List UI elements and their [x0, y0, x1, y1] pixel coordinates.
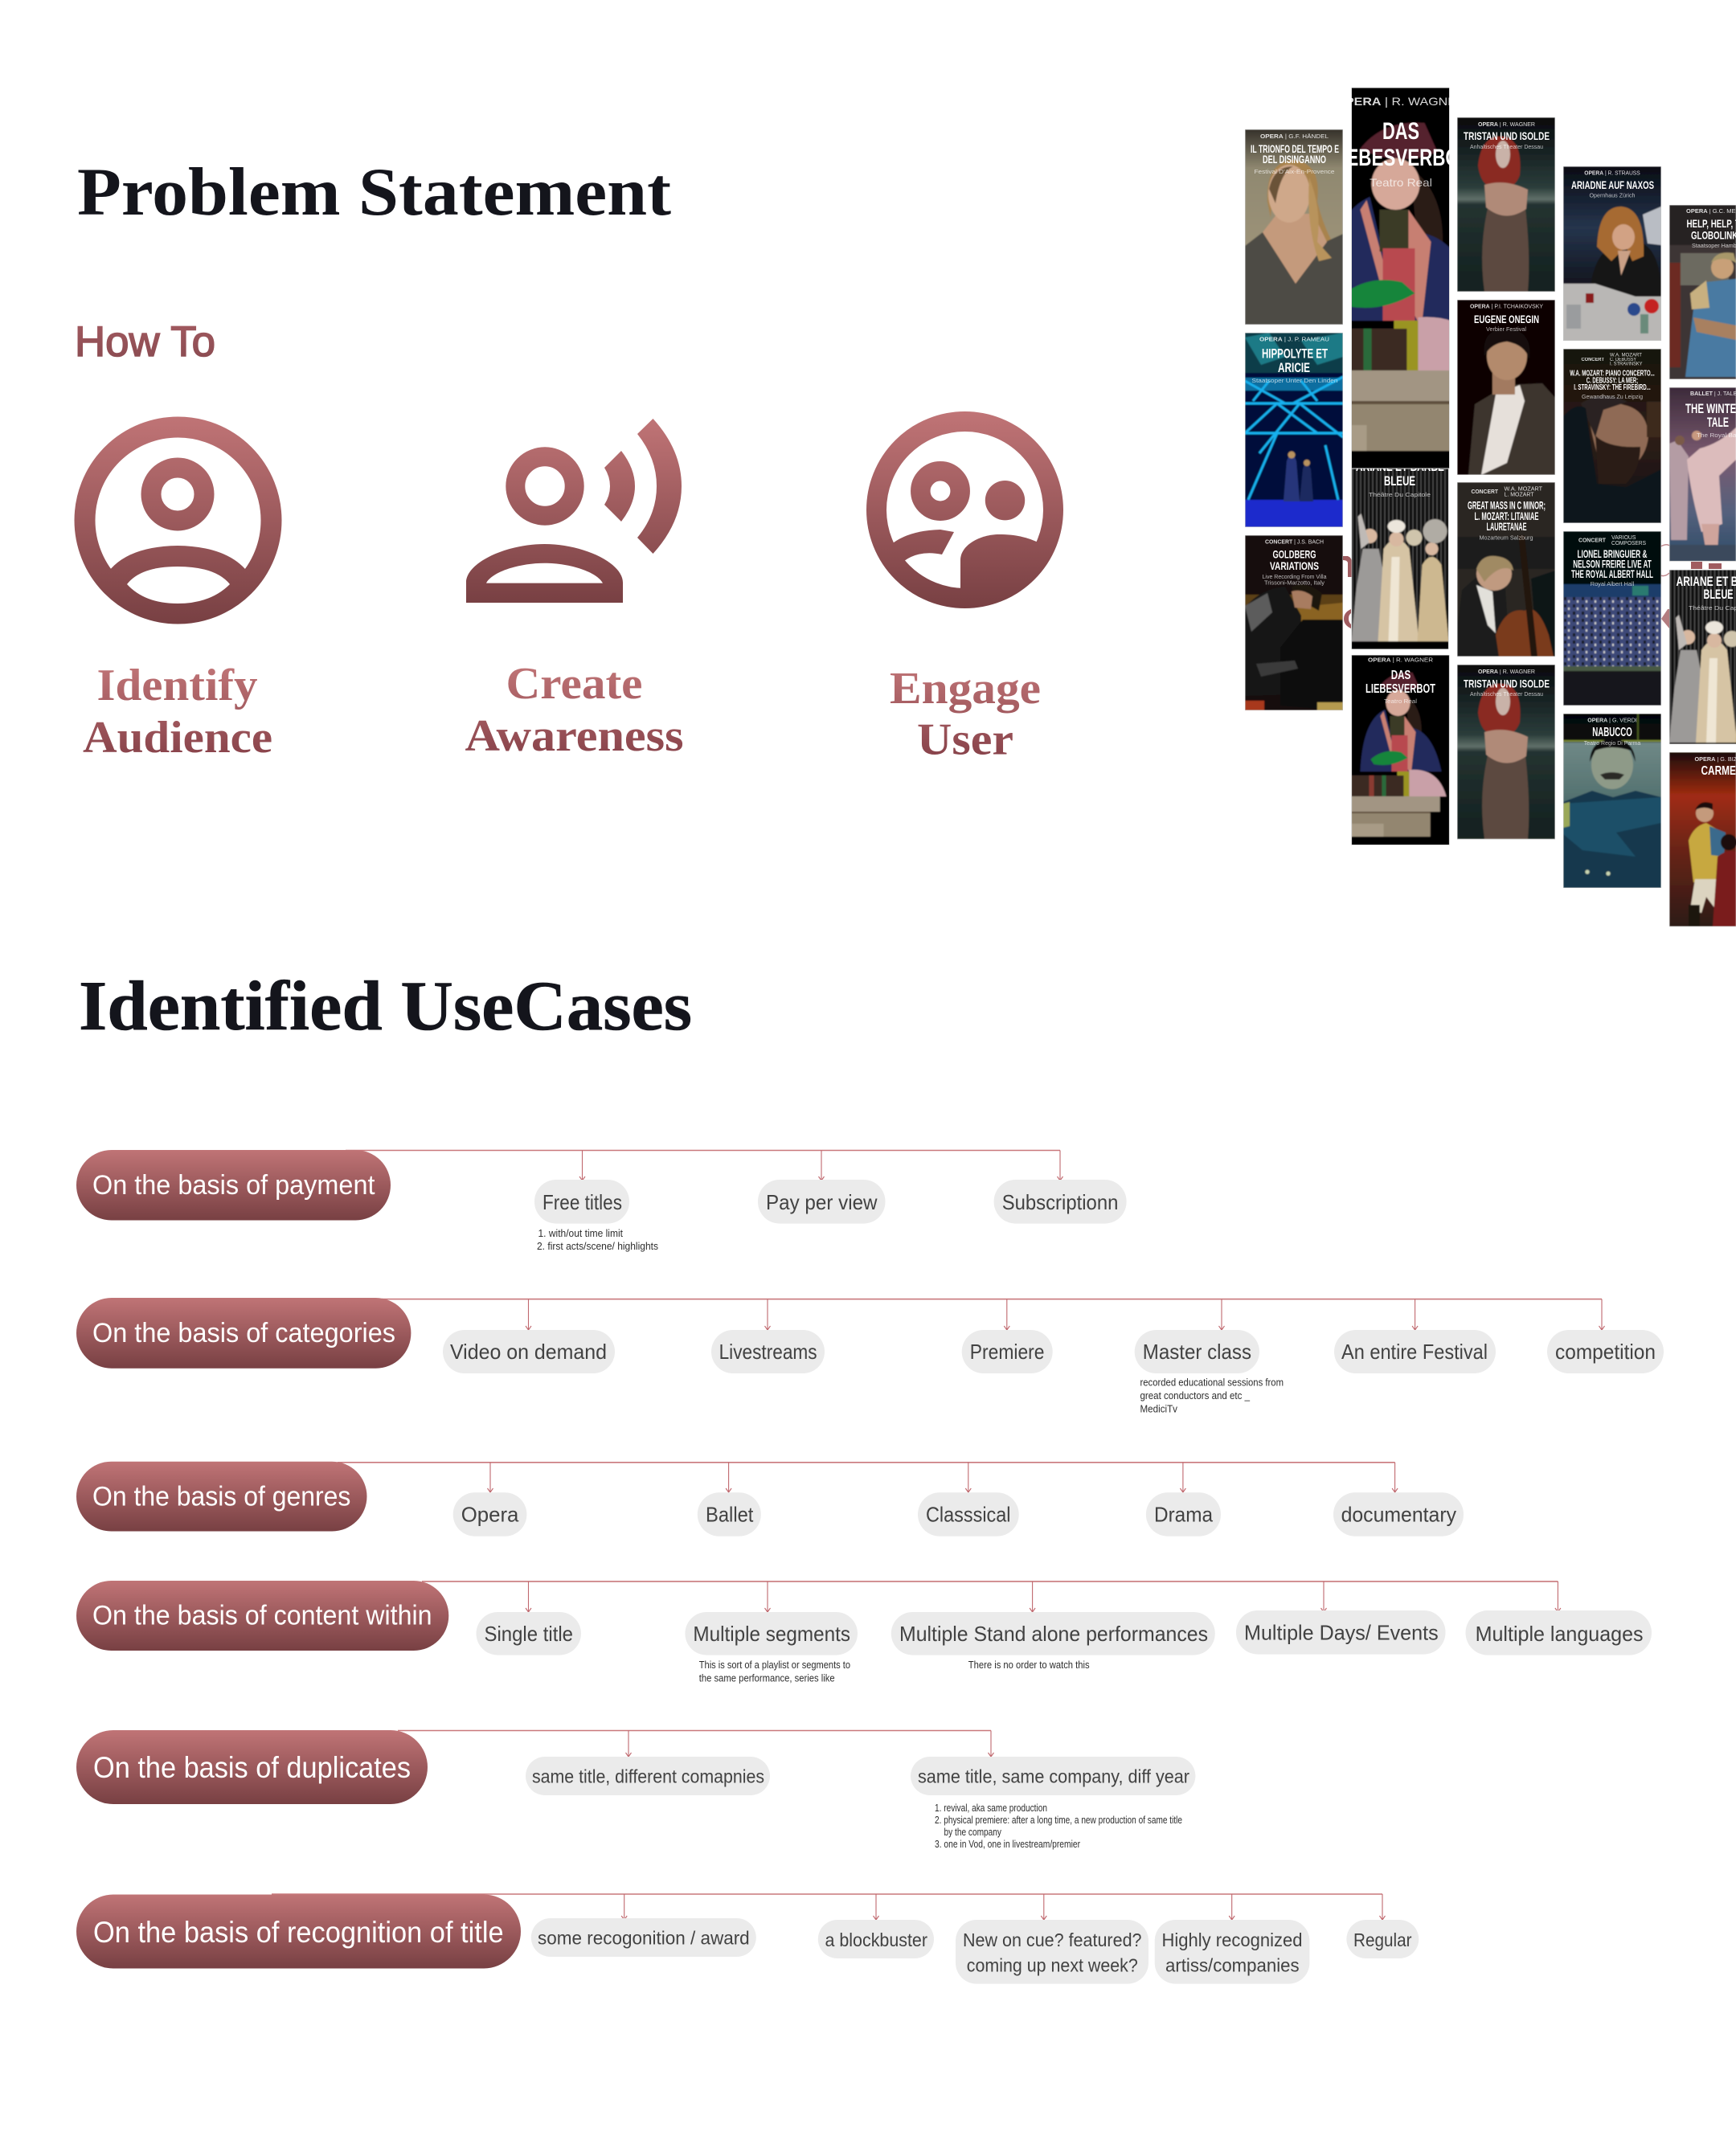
poster: Tristan und Isolde, second: [1457, 665, 1555, 839]
poster: Das Liebesverbot: [1352, 655, 1450, 845]
tree: on the basis of payment: [76, 1150, 1127, 1252]
poster: Il Trionfo del Tempo e del Disinganno: [1245, 129, 1343, 325]
option: same title, different comapnies: same title, different comapnies: [532, 1766, 764, 1787]
poster: Das Liebesverbot: LIEBESVERBOT: [1365, 682, 1435, 696]
option: Classsical: [918, 1492, 1019, 1537]
note: same company details: 2. physical premiere: after a long time, a new production of same title: [935, 1815, 1182, 1826]
label: Create Awareness: Awareness: [465, 711, 683, 761]
note: same company details: 3. one in Vod, one in livestream/premier: [935, 1839, 1080, 1850]
category pill: genres: On the basis of genres: [92, 1482, 350, 1512]
tree: on the basis of categories: [76, 1298, 1664, 1414]
label: Engage User: Engage: [890, 664, 1041, 714]
category pill: categories: On the basis of categories: [92, 1318, 395, 1348]
poster: Great Mass in C Minor: L. MOZART: [1505, 492, 1534, 498]
option: Multiple segments: Multiple segments: [693, 1622, 850, 1646]
poster: W.A. Mozart piano concerto: C. DEBUSSY: [1610, 358, 1636, 362]
option: Multiple languages: [1466, 1610, 1652, 1655]
option: documentary: documentary: [1341, 1503, 1456, 1527]
poster: Great Mass in C Minor: GREAT MASS IN C MINOR;: [1468, 498, 1546, 511]
option: competition: competition: [1555, 1340, 1656, 1364]
poster: Tristan und Isolde: Anhaltisches Theater Dessau: [1470, 143, 1543, 150]
option: Livestreams: Livestreams: [719, 1340, 817, 1364]
poster: Lionel Bringuier and Nelson Freire: THE ROYAL ALBERT HALL: [1571, 567, 1653, 580]
poster: Tristan und Isolde: OPERA | R. WAGNER: [1478, 122, 1535, 128]
poster: Tristan und Isolde, second: Anhaltisches Theater Dessau: [1470, 690, 1543, 698]
option: Multiple segments: [685, 1612, 858, 1655]
poster: Tristan und Isolde, second: TRISTAN UND ISOLDE: [1464, 677, 1550, 689]
option: Subscriptionn: Subscriptionn: [1002, 1190, 1118, 1214]
heading: Identified UseCases: Identified UseCases: [79, 968, 692, 1045]
poster: Il Trionfo del Tempo e del Disinganno: DEL DISINGANNO: [1263, 153, 1326, 166]
option: Multiple languages: Multiple languages: [1476, 1622, 1644, 1646]
subheading: How To: How To: [75, 318, 215, 366]
icon: person broadcasting: [466, 419, 682, 603]
note: free title details: 1. with/out time limit: [538, 1228, 623, 1239]
option: new on cue: [956, 1920, 1148, 1984]
poster: W.A. Mozart piano concerto: [1563, 349, 1661, 523]
poster: Tristan und Isolde, second: OPERA | R. WAGNER: [1478, 669, 1535, 675]
poster: Das Liebesverbot, enlarged: DAS: [1382, 118, 1419, 145]
poster: Goldberg Variations: Trissoni-Marzotto, Italy: [1264, 579, 1325, 587]
poster: Carmen: [1669, 752, 1736, 927]
poster: Il Trionfo del Tempo e del Disinganno: OPERA | G.F. HÄNDEL: [1260, 133, 1329, 140]
poster: Nabucco: OPERA | G. VERDI: [1587, 718, 1637, 723]
option: Premiere: [962, 1330, 1053, 1373]
poster: Goldberg Variations: GOLDBERG: [1273, 548, 1316, 561]
poster: Eugene Onegin: OPERA | P.I. TCHAIKOVSKY: [1470, 304, 1543, 310]
note: master class details: [1140, 1377, 1284, 1414]
category pill: genres: [76, 1462, 366, 1532]
label: Create Awareness: Create: [506, 659, 643, 709]
panel: how-to goals: [83, 419, 1053, 765]
option: some recogonition / award: some recogonition / award: [538, 1928, 750, 1949]
panel: opera poster collage: [1245, 88, 1736, 927]
tree: on the basis of genres: [76, 1462, 1464, 1537]
option: new on cue: New on cue? featured?: [963, 1929, 1141, 1950]
poster: Das Liebesverbot: OPERA | R. WAGNER: [1368, 657, 1433, 664]
poster: Il Trionfo del Tempo e del Disinganno: IL TRIONFO DEL TEMPO E: [1251, 142, 1339, 155]
option: Free titles: [534, 1180, 629, 1224]
category pill: recognition of title: On the basis of recognition of title: [93, 1916, 504, 1949]
poster: Lionel Bringuier and Nelson Freire: NELSON FREIRE LIVE AT: [1573, 558, 1652, 571]
poster: Ariane et Barbe-Bleue: Théâtre Du Capitole: [1369, 491, 1431, 498]
option: Video on demand: Video on demand: [450, 1340, 607, 1364]
icon: person in circle: [85, 428, 272, 615]
poster: Hippolyte et Aricie: [1245, 333, 1343, 527]
poster: Das Liebesverbot: Teatro Real: [1384, 698, 1417, 705]
tree: on the basis of duplicates: [76, 1730, 1195, 1850]
icon: two people in circle: [876, 421, 1053, 599]
poster: Das Liebesverbot, enlarged: [1352, 88, 1450, 469]
option: Pay per view: [758, 1180, 886, 1224]
label: Engage User: User: [917, 715, 1013, 765]
poster: Tristan und Isolde: TRISTAN UND ISOLDE: [1464, 129, 1550, 142]
option: a blockbuster: [818, 1920, 934, 1958]
poster: Nabucco: NABUCCO: [1592, 726, 1632, 739]
poster: Hippolyte et Aricie: ARICIE: [1278, 360, 1310, 375]
tree: on the basis of content within: [76, 1581, 1652, 1684]
poster: Il Trionfo del Tempo e del Disinganno: Festival D'Aix-En-Provence: [1254, 168, 1334, 175]
poster: Ariadne auf Naxos: ARIADNE AUF NAXOS: [1571, 178, 1654, 191]
poster: W.A. Mozart piano concerto: CONCERT: [1582, 358, 1604, 362]
option: Single title: Single title: [484, 1622, 573, 1646]
poster: Lionel Bringuier and Nelson Freire: CONCERT: [1578, 538, 1607, 543]
note: free title details: [537, 1228, 658, 1252]
poster: Tristan und Isolde: [1457, 117, 1555, 292]
category pill: content within: [76, 1581, 448, 1651]
poster: Ariadne auf Naxos: Opernhaus Zürich: [1590, 191, 1635, 199]
poster: W.A. Mozart piano concerto: W.A. MOZART: [1610, 354, 1642, 358]
poster: Goldberg Variations: VARIATIONS: [1270, 559, 1319, 572]
option: Regular: Regular: [1353, 1929, 1412, 1950]
note: multiple segments details: [699, 1659, 850, 1684]
option: highly recognized: [1155, 1920, 1309, 1984]
poster: W.A. Mozart piano concerto: I. STRAVINSKY: THE FIREBIRD...: [1574, 383, 1651, 392]
option: Classsical: Classsical: [926, 1503, 1011, 1527]
option: Ballet: [698, 1492, 761, 1537]
poster: Nabucco: [1563, 714, 1661, 888]
poster: Lionel Bringuier and Nelson Freire: [1563, 531, 1661, 706]
option: Multiple Days/ Events: Multiple Days/ Events: [1244, 1621, 1439, 1645]
poster: Hippolyte et Aricie: Staatsoper Unter Den Linden: [1252, 377, 1337, 384]
poster: Great Mass in C Minor: LAURETANAE: [1487, 520, 1527, 533]
poster: Ariane et Barbe-Bleue: ARIANE ET BARBE: [1356, 459, 1444, 474]
note: master class details: recorded educational sessions from: [1140, 1377, 1284, 1389]
category pill: content within: On the basis of content within: [92, 1600, 432, 1631]
category pill: duplicates: [76, 1730, 428, 1804]
poster: Das Liebesverbot, enlarged: Teatro Real: [1370, 176, 1432, 189]
poster: Eugene Onegin: [1457, 300, 1555, 475]
goal: create awareness: [465, 419, 683, 761]
option: Subscriptionn: [994, 1180, 1127, 1224]
option: new on cue: coming up next week?: [967, 1955, 1138, 1976]
poster: Lionel Bringuier and Nelson Freire: LIONEL BRINGUIER &: [1577, 547, 1648, 560]
option: Master class: [1135, 1330, 1259, 1373]
note: multiple segments details: the same performance, series like: [699, 1673, 835, 1684]
option: Multiple Days/ Events: [1236, 1610, 1445, 1655]
label: Identify Audience: Identify: [96, 661, 257, 710]
rose text fragments hidden behind posters: [1343, 545, 1722, 628]
option: competition: [1547, 1330, 1664, 1373]
option: Regular: [1346, 1920, 1419, 1958]
poster: Lionel Bringuier and Nelson Freire: COMPOSERS: [1611, 541, 1646, 546]
poster: Lionel Bringuier and Nelson Freire: VARIOUS: [1611, 535, 1636, 541]
option: same title, different comapnies: [526, 1757, 770, 1795]
option: An entire Festival: An entire Festival: [1341, 1340, 1488, 1364]
option: Pay per view: Pay per view: [766, 1190, 878, 1214]
option: some recogonition / award: [531, 1918, 756, 1957]
category pill: payment: On the basis of payment: [92, 1170, 375, 1201]
option: highly recognized: Highly recognized: [1162, 1929, 1302, 1950]
poster: Hippolyte et Aricie: OPERA | J. P. RAMEAU: [1259, 338, 1329, 342]
option: Multiple Stand alone performances: Multiple Stand alone performances: [899, 1622, 1208, 1646]
category pill: payment: [76, 1150, 391, 1220]
goal: identify audience: [83, 428, 272, 763]
note: master class details: MediciTv: [1140, 1403, 1178, 1414]
option: Master class: Master class: [1143, 1340, 1251, 1364]
poster: W.A. Mozart piano concerto: C. DEBUSSY: LA MER;: [1587, 376, 1638, 386]
poster: Eugene Onegin: EUGENE ONEGIN: [1474, 313, 1539, 325]
poster: Ariane et Barbe-Bleue: [1352, 459, 1448, 649]
option: Ballet: Ballet: [706, 1503, 754, 1527]
poster: Great Mass in C Minor: CONCERT: [1471, 489, 1499, 495]
poster: Ariadne auf Naxos: [1563, 166, 1661, 341]
tree: on the basis of recognition of title: [76, 1894, 1419, 1984]
option: An entire Festival: [1334, 1330, 1496, 1373]
poster: Goldberg Variations: CONCERT | J.S. BACH: [1265, 540, 1324, 545]
poster: Help, Help, the Globolinks: [1669, 205, 1736, 379]
poster: Great Mass in C Minor: W.A. MOZART: [1505, 487, 1543, 492]
poster: Great Mass in C Minor: L. MOZART: LITANIAE: [1474, 509, 1538, 522]
option: same title, same company, diff year: [911, 1757, 1195, 1795]
option: Single title: [476, 1612, 581, 1655]
option: Opera: [453, 1492, 526, 1537]
title: Problem Statement: Problem Statement: [77, 154, 671, 230]
note: stand alone details: There is no order to watch this: [968, 1659, 1090, 1671]
poster: Ariane et Barbe-Bleue: BLEUE: [1384, 473, 1415, 489]
option: Livestreams: [711, 1330, 825, 1373]
poster: Ariadne auf Naxos: OPERA | R. STRAUSS: [1584, 170, 1640, 177]
note: same company details: 1. revival, aka same production: [935, 1803, 1047, 1814]
label: Identify Audience: Audience: [83, 713, 272, 763]
note: same company details: by the company: [944, 1827, 1002, 1838]
category pill: categories: [76, 1298, 411, 1369]
poster: Das Liebesverbot, enlarged: OPERA | R. WAGNER: [1336, 95, 1466, 108]
goal: engage user: [876, 421, 1053, 765]
poster: W.A. Mozart piano concerto: W.A. MOZART: PIANO CONCERTO...: [1570, 370, 1655, 378]
option: Multiple Stand alone performances: [891, 1612, 1215, 1655]
poster: Hippolyte et Aricie: HIPPOLYTE ET: [1262, 346, 1328, 362]
poster: Great Mass in C Minor: [1457, 482, 1555, 657]
option: Drama: [1146, 1492, 1221, 1537]
poster: Ariane et Barbe-Bleue, second: [1669, 570, 1736, 751]
option: Opera: Opera: [461, 1503, 519, 1527]
poster: Nabucco: Teatro Regio Di Parma: [1584, 739, 1641, 747]
option: Free titles: Free titles: [542, 1190, 622, 1214]
category pill: duplicates: On the basis of duplicates: [93, 1751, 411, 1784]
note: master class details: great conductors and etc _: [1140, 1390, 1251, 1401]
poster: W.A. Mozart piano concerto: Gewandhaus Zu Leipzig: [1582, 393, 1643, 400]
poster: Goldberg Variations: [1245, 535, 1343, 710]
poster: Das Liebesverbot, enlarged: LIEBESVERBOT: [1331, 145, 1471, 171]
option: documentary: [1333, 1492, 1464, 1537]
option: Video on demand: [443, 1330, 615, 1373]
note: free title details: 2. first acts/scene/ highlights: [537, 1241, 658, 1252]
option: same title, same company, diff year: same title, same company, diff year: [918, 1766, 1189, 1787]
poster: W.A. Mozart piano concerto: I. STRAVINSKY: [1610, 362, 1643, 366]
poster: Great Mass in C Minor: Mozarteum Salzburg: [1479, 534, 1533, 542]
poster: Goldberg Variations: Live Recording From Villa: [1262, 573, 1327, 580]
note: same company details: [935, 1803, 1182, 1850]
option: highly recognized: artiss/companies: [1165, 1955, 1300, 1976]
poster: Eugene Onegin: Verbier Festival: [1486, 325, 1526, 333]
poster: Das Liebesverbot: DAS: [1391, 669, 1410, 682]
note: multiple segments details: This is sort of a playlist or segments to: [699, 1659, 850, 1671]
option: Drama: Drama: [1154, 1503, 1214, 1527]
option: a blockbuster: a blockbuster: [825, 1929, 927, 1950]
poster: Lionel Bringuier and Nelson Freire: Royal Albert Hall: [1591, 580, 1635, 587]
poster: The Winter's Tale: [1669, 387, 1736, 561]
category pill: recognition of title: [76, 1895, 521, 1969]
option: Premiere: Premiere: [970, 1340, 1045, 1364]
